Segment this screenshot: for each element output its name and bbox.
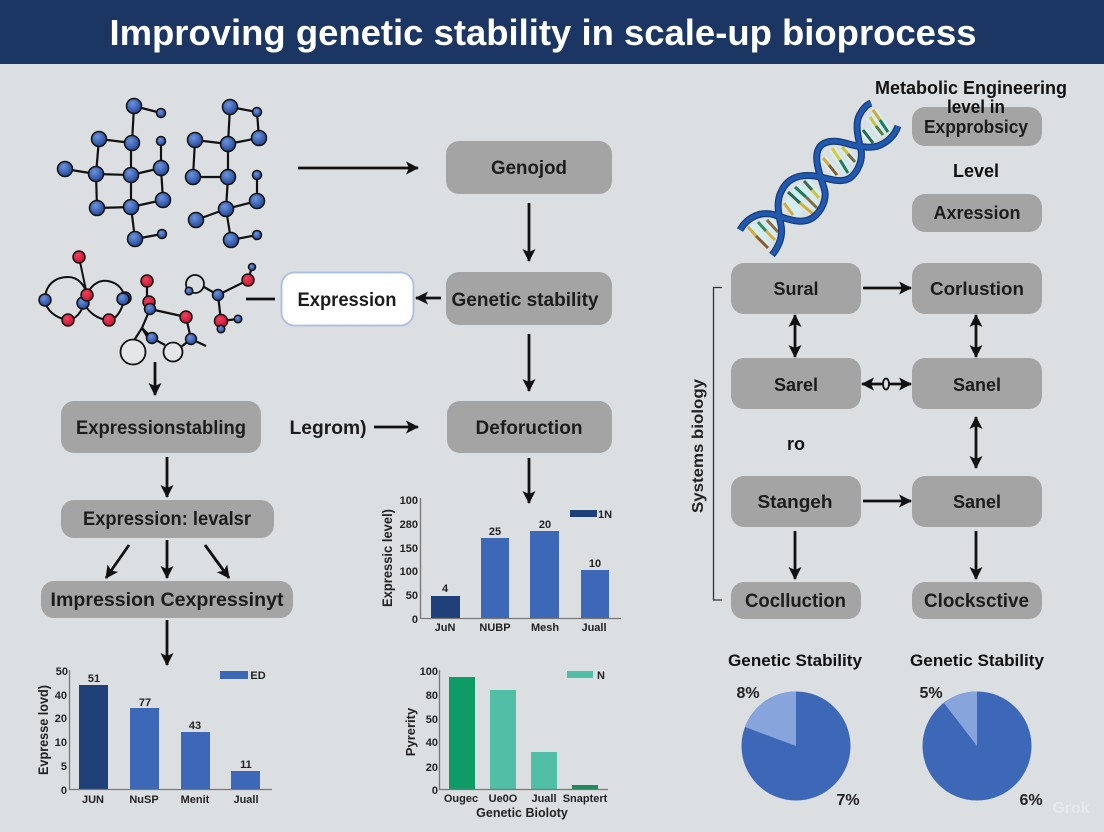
- bracket: systems biology: [714, 288, 722, 600]
- box: Genetic stability: Genetic stability: [452, 290, 599, 311]
- bar chart: expression level middle: 150: [400, 543, 418, 555]
- double arrow: Sural and Sarel: [794, 315, 796, 357]
- bar chart: expression level left: 11: [240, 759, 252, 771]
- bar chart: purity: 80: [426, 690, 438, 702]
- double arrow: Sanel and Sanel: [975, 417, 977, 468]
- bar chart: purity: Pyrerity: [403, 707, 418, 756]
- double arrow: Sarel and Sanel: [862, 378, 911, 390]
- bar chart: purity: 0: [432, 785, 438, 797]
- bar chart: expression level left: 51: [88, 673, 100, 685]
- box: Sarel: Sarel: [774, 375, 818, 395]
- box: Expressionstabling: Expressionstabling: [76, 418, 246, 439]
- text: level in: level in: [947, 97, 1005, 117]
- icon: blue molecule left: [58, 98, 170, 246]
- chart caption: Genetic Bioloty: [476, 806, 568, 820]
- bar chart: purity: Ougec: [444, 793, 478, 805]
- bar chart: purity: Ue0O: [489, 793, 518, 805]
- box: Cocluction: [731, 582, 861, 619]
- heading: Metabolic Engineering: Metabolic Engineering: [875, 78, 1067, 98]
- bar chart: expression level left: 10: [55, 737, 67, 749]
- bar chart: expression level left: Menit: [181, 794, 210, 806]
- pie chart: left genetic stability: 7%: [836, 792, 860, 809]
- arrow: Sural to Corlustion: [863, 287, 911, 289]
- box: Deforuction: Deforuction: [476, 418, 582, 439]
- box: Expression levalsr: [61, 500, 274, 538]
- box: Genojod: [446, 141, 612, 194]
- bar chart: purity: Juall: [531, 793, 557, 805]
- bar chart: expression level left: JUN: [82, 794, 104, 806]
- bar chart: expression level middle: NUBP: [479, 622, 511, 634]
- bar chart: purity: Snaptert: [563, 793, 608, 805]
- box: Expression: Expression: [298, 290, 396, 311]
- box: Axression: [912, 194, 1042, 232]
- arrow: Stangeh to Sanel: [863, 500, 911, 502]
- box: Corlustion: [912, 263, 1042, 314]
- text: Legrom): Legrom): [290, 418, 366, 439]
- arrow: Genetic stability to Deforuction: [528, 334, 530, 391]
- bar chart: purity: 50: [426, 714, 438, 726]
- box: Deforuction: [447, 401, 612, 453]
- bar chart: expression level middle: 100: [400, 566, 418, 578]
- pie chart: left genetic stability: [728, 651, 863, 809]
- bar chart: purity: [403, 666, 608, 820]
- pie chart: right genetic stability: [910, 651, 1045, 809]
- box: Sanel lower: [912, 476, 1042, 527]
- box: Sanel upper: [912, 358, 1042, 409]
- bar chart: expression level middle: [379, 495, 621, 634]
- bar chart: expression level left: Evpresse lovd): [35, 685, 51, 775]
- box: Sarel: [731, 358, 861, 409]
- box: Sanel upper: Sanel: [953, 375, 1001, 395]
- pie title: Genetic Stability: [910, 651, 1045, 670]
- header banner: [0, 0, 1104, 64]
- bar chart: expression level middle: Juall: [581, 622, 607, 634]
- pie chart: left genetic stability: 8%: [736, 685, 760, 702]
- bar chart: expression level left: Juall: [233, 794, 259, 806]
- arrows: three way split: [106, 540, 229, 578]
- bar chart: expression level middle: Mesh: [531, 622, 559, 634]
- box: Exprobsicy: [912, 107, 1042, 146]
- bar chart: expression level middle: 1N: [598, 509, 612, 521]
- arrow: molecule to Expressionstabling: [154, 362, 156, 395]
- bar chart: purity: 100: [420, 666, 438, 678]
- watermark: Grok: Grok: [1052, 800, 1090, 817]
- box: Cocluction: Coclluction: [745, 591, 846, 612]
- bar chart: expression level middle: 25: [489, 526, 501, 538]
- bar chart: expression level middle: 50: [406, 590, 418, 602]
- arrow: Legrom to Deforuction: [374, 426, 418, 428]
- bar chart: expression level left: 43: [189, 720, 201, 732]
- bar chart: expression level middle: 100: [400, 495, 418, 507]
- arrow: Stangeh to Cocluction: [794, 531, 796, 579]
- arrow: Deforuction to chart: [528, 458, 530, 503]
- arrow: Sanel to Clocksctive: [975, 531, 977, 579]
- box: Axression: Axression: [933, 203, 1021, 223]
- box: Corlustion: Corlustion: [930, 279, 1024, 299]
- bar chart: expression level middle: 280: [400, 519, 418, 531]
- box: Expression: [282, 272, 414, 326]
- arrow: Genojod to Genetic stability: [528, 203, 530, 261]
- box: Clocksctive: Clocksctive: [924, 591, 1029, 612]
- box: Clocksctive: [912, 582, 1042, 619]
- bar chart: purity: 40: [426, 737, 438, 749]
- bar chart: expression level left: 20: [55, 713, 67, 725]
- box: Sural: [731, 263, 861, 314]
- bar chart: expression level left: 77: [139, 697, 151, 709]
- icon: DNA helix: [740, 103, 898, 255]
- bar chart: expression level left: 50: [56, 666, 68, 678]
- text: ro: ro: [787, 434, 805, 454]
- pie chart: right genetic stability: 6%: [1019, 792, 1043, 809]
- box: Impression expressinyt: Impression Cexpressinyt: [50, 590, 284, 611]
- bar chart: expression level middle: JuN: [435, 622, 455, 634]
- bar chart: expression level left: 40: [55, 690, 67, 702]
- bar chart: purity: 20: [426, 762, 438, 774]
- box: Exprobsicy: Expprobsicy: [924, 117, 1028, 137]
- arrow: Impression to chart: [166, 620, 168, 665]
- bar chart: expression level left: [35, 666, 272, 806]
- bar chart: expression level left: 0: [61, 785, 67, 797]
- icon: right small molecule: [185, 264, 256, 333]
- bar chart: expression level middle: Expressic level): [379, 509, 395, 607]
- bar chart: expression level left: NuSP: [129, 794, 159, 806]
- icon: red and blue ring molecule: [39, 251, 131, 326]
- text: Systems biology: Systems biology: [690, 379, 707, 513]
- bar chart: expression level middle: 20: [539, 519, 551, 531]
- bar chart: expression level middle: 0: [412, 614, 418, 626]
- icon: blue molecule right: [186, 100, 266, 248]
- bar chart: expression level left: ED: [250, 670, 266, 682]
- bar chart: expression level left: 5: [61, 761, 67, 773]
- box: Sanel lower: Sanel: [953, 492, 1001, 512]
- pie title: Genetic Stability: [728, 651, 863, 670]
- arrow: Expressionstabling to levels: [166, 457, 168, 497]
- box: Stangeh: Stangeh: [758, 492, 832, 512]
- double arrow: Corlustion and Sanel: [975, 315, 977, 357]
- text: Level: Level: [953, 161, 999, 181]
- connector: molecule to Expression: [246, 298, 275, 300]
- box: Genojod: Genojod: [491, 158, 567, 179]
- box: Stangeh: [731, 476, 861, 527]
- icon: middle molecule: [120, 275, 206, 364]
- title: Improving genetic stability in scale-up bioprocess: [110, 12, 976, 53]
- bar chart: purity: N: [597, 670, 605, 682]
- box: Impression expressinyt: [41, 581, 293, 618]
- box: Sural: Sural: [773, 279, 819, 299]
- box: Expression levalsr: Expression: levalsr: [83, 509, 252, 530]
- box: Expressionstabling: [61, 401, 261, 453]
- pie chart: right genetic stability: 5%: [919, 685, 943, 702]
- box: Genetic stability: [446, 272, 612, 325]
- bar chart: expression level middle: 10: [589, 558, 601, 570]
- arrow: Genetic stability to Expression: [416, 297, 441, 299]
- arrow: molecules to Genojod: [298, 167, 418, 169]
- bar chart: expression level middle: 4: [442, 583, 449, 595]
